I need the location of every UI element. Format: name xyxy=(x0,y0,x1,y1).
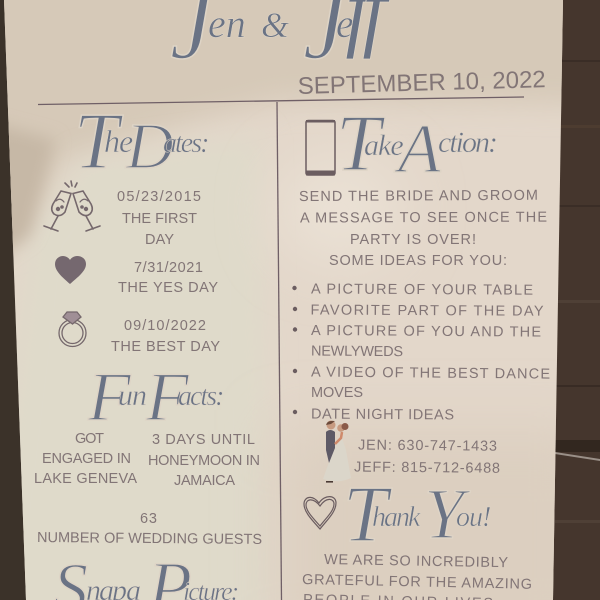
fact: honeymoon: HONEYMOON IN xyxy=(148,453,260,469)
panel: take action xyxy=(292,100,550,483)
intro text: SEND THE BRIDE AND GROOM xyxy=(299,188,538,205)
icon: heart xyxy=(55,256,86,284)
closing message: GRATEFUL FOR THE AMAZING xyxy=(302,572,532,593)
heading: take action: A xyxy=(394,111,441,188)
heading: thank you: hank xyxy=(372,502,421,533)
date: first day: DAY xyxy=(145,232,174,248)
date: best day xyxy=(111,318,220,355)
heading: fun facts: acts: xyxy=(178,381,223,412)
icon: phone xyxy=(306,120,335,176)
fact: honeymoon xyxy=(148,432,260,489)
date: first day: 05/23/2015 xyxy=(117,189,201,205)
date: best day: 09/10/2022 xyxy=(124,318,206,334)
icon: outline heart xyxy=(304,497,336,529)
bullet list: FAVORITE PART OF THE DAY xyxy=(310,302,544,320)
date: best day: THE BEST DAY xyxy=(111,339,220,355)
closing message xyxy=(302,552,532,600)
fact: honeymoon: JAMAICA xyxy=(174,473,235,489)
bullet list: A VIDEO OF THE BEST DANCE xyxy=(311,365,550,383)
contact phone numbers: JEN: 630-747-1433 xyxy=(358,438,497,455)
heading: fun facts: F xyxy=(145,359,190,436)
heading: take action: ction: xyxy=(438,126,496,159)
contact phone numbers: JEFF: 815-712-6488 xyxy=(354,460,500,477)
heading: the dates: T xyxy=(74,98,124,186)
heading: the dates: D xyxy=(125,110,174,183)
fact: guests: 63 xyxy=(140,511,157,527)
icon: champagne glasses xyxy=(44,181,100,231)
wedding date: SEPTEMBER 10, 2022 xyxy=(297,66,546,100)
intro text xyxy=(299,188,547,269)
heading: thank you: Y xyxy=(424,474,471,554)
bullet list: A PICTURE OF YOU AND THE xyxy=(311,323,541,341)
intro text: SOME IDEAS FOR YOU: xyxy=(329,253,507,269)
panel: fun facts xyxy=(34,359,262,548)
title: couple names: en xyxy=(208,1,246,46)
panel: the dates xyxy=(44,98,220,355)
heading: fun facts: F xyxy=(87,359,132,436)
fact: engagement xyxy=(34,431,137,487)
date: first day: THE FIRST xyxy=(122,211,197,227)
bullet list: MOVES xyxy=(311,385,363,401)
fact: honeymoon: 3 DAYS UNTIL xyxy=(152,432,255,448)
icon: bride and groom xyxy=(323,420,351,483)
bullet list: NEWLYWEDS xyxy=(311,344,403,360)
icon: ring xyxy=(59,312,86,346)
fact: engagement: ENGAGED IN xyxy=(42,451,131,467)
date: yes day xyxy=(118,260,218,296)
heading: thank you: T xyxy=(343,471,393,559)
heading: the dates: ates: xyxy=(163,128,208,159)
heading: take action: ake xyxy=(364,129,403,162)
date: yes day: THE YES DAY xyxy=(118,280,218,296)
bullet list: DATE NIGHT IDEAS xyxy=(311,407,454,423)
closing message: WE ARE SO INCREDIBLY xyxy=(324,552,509,571)
fact: engagement: GOT xyxy=(75,431,104,447)
contact phone numbers xyxy=(354,438,500,477)
fact: engagement: LAKE GENEVA xyxy=(34,471,137,487)
panel: thank you xyxy=(302,488,531,600)
date: first day xyxy=(117,189,201,248)
intro text: A MESSAGE TO SEE ONCE THE xyxy=(300,210,547,226)
bullet list: A PICTURE OF YOUR TABLE xyxy=(311,282,533,299)
heading: the dates: he xyxy=(104,123,133,159)
title: couple names: & xyxy=(261,5,289,45)
heading: fun facts: un xyxy=(118,379,146,412)
intro text: PARTY IS OVER! xyxy=(350,232,476,248)
bullet list xyxy=(292,282,550,423)
fact: guests xyxy=(37,511,262,548)
heading: take action: T xyxy=(336,100,386,188)
header and column rules xyxy=(38,97,524,600)
title: couple names: e xyxy=(336,1,354,46)
date: yes day: 7/31/2021 xyxy=(134,260,203,276)
heading: thank you: ou! xyxy=(456,502,491,533)
heading: snap a picture xyxy=(56,564,238,600)
fact: guests: NUMBER OF WEDDING GUESTS xyxy=(37,530,262,548)
